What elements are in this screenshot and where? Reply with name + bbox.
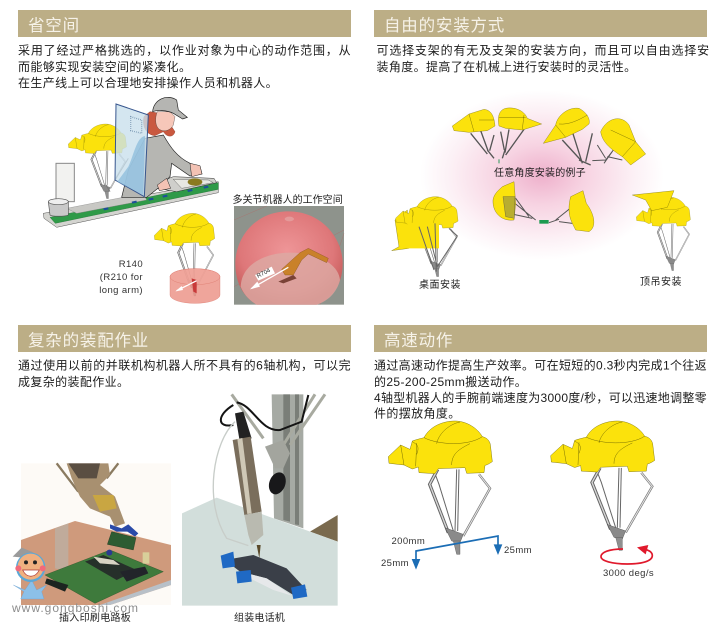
caption: insert PCB: 插入印刷电路板 xyxy=(59,611,131,624)
photo: telephone assembly xyxy=(182,394,338,606)
caption: desktop mounting: 桌面安装 xyxy=(419,278,461,291)
text: R140 label: R140 xyxy=(119,259,143,270)
pink glow background xyxy=(420,90,664,260)
robot: wrist rotation xyxy=(551,421,655,564)
text block: mounting description: 装角度。提高了在机械上进行安装时的灵活性。 xyxy=(376,59,636,74)
robot: 25-200-25mm transfer xyxy=(388,421,502,570)
heading bar: space saving xyxy=(18,10,351,37)
robot: ceiling mounted xyxy=(632,191,690,271)
text block: mounting description: 可选择支架的有无及支架的安装方向，而且可以自由选择安 xyxy=(376,42,710,58)
chart: transfer path arrows xyxy=(412,536,502,570)
safety glass panel xyxy=(115,104,148,197)
labels: transfer distances: 25mm xyxy=(381,558,409,569)
text block: high speed description: 件的摆放角度。 xyxy=(374,406,461,420)
robot: desktop mounted xyxy=(392,197,458,277)
text block: high speed description xyxy=(374,358,707,420)
labels: transfer distances: 200mm xyxy=(392,536,425,547)
heading bar: complex assembly: 复杂的装配作业 xyxy=(28,331,149,350)
text block: assembly description: 成复杂的装配作业。 xyxy=(18,374,129,389)
photo: circuit board insertion xyxy=(21,463,171,605)
heading bar: flexible mounting xyxy=(374,10,707,37)
text block: high speed description: 通过高速动作提高生产效率。可在短短的0.3秒内完成1个往返 xyxy=(374,358,707,372)
panel: flexible mounting xyxy=(374,10,710,291)
text block: high speed description: 4轴型机器人的手腕前端速度为3000度/秒，可以迅速地调整零 xyxy=(374,390,707,405)
heading bar: complex assembly xyxy=(18,325,351,352)
text block: space saving description: 而能够实现安装空间的紧凑化。 xyxy=(18,59,191,74)
heading bar: high speed xyxy=(374,325,707,352)
labels: transfer distances: 25mm xyxy=(504,545,532,556)
illustration: robot cell with operator xyxy=(43,97,218,227)
robots mounted at arbitrary angles xyxy=(452,108,646,232)
text block: assembly description xyxy=(18,358,351,389)
heading bar: space saving: 省空间 xyxy=(28,16,80,35)
caption: ceiling mounting: 顶吊安装 xyxy=(640,275,682,288)
text block: mounting description xyxy=(376,42,710,74)
watermark mascot xyxy=(13,548,47,599)
caption: arbitrary angle examples: 任意角度安装的例子 xyxy=(494,166,586,179)
arrow: rotation 3000 deg/s xyxy=(601,545,652,564)
text: R140 label: long arm) xyxy=(99,285,143,296)
text block: high speed description: 的25-200-25mm搬送动作。 xyxy=(374,374,527,389)
panel: high speed motion xyxy=(374,325,707,579)
robot: tilted up xyxy=(543,108,592,165)
label: R704: R704 xyxy=(256,268,272,280)
robot: tilted right xyxy=(498,108,542,158)
text block: assembly description: 通过使用以前的并联机构机器人所不具有的6轴机构，可以完 xyxy=(18,358,351,372)
label: 3000 deg/s: 3000 deg/s xyxy=(603,568,654,579)
labels: transfer distances xyxy=(381,536,532,569)
caption: articulated robot workspace: 多关节机器人的工作空间 xyxy=(232,193,343,206)
figure: operator xyxy=(122,97,202,197)
text block: space saving description: 采用了经过严格挑选的，以作业对象为中心的动作范围，从 xyxy=(18,42,351,58)
caption: telephone assembly: 组装电话机 xyxy=(234,611,285,624)
text: R140 label: (R210 for xyxy=(100,272,143,283)
panel: complex assembly xyxy=(11,325,351,624)
heading bar: flexible mounting: 自由的安装方式 xyxy=(384,16,505,35)
text: R140 label xyxy=(99,259,143,296)
panel: space saving xyxy=(18,10,351,305)
image: articulated robot spherical workspace xyxy=(234,206,344,305)
heading bar: high speed: 高速动作 xyxy=(384,331,453,350)
robot: tilted left xyxy=(452,109,495,158)
small robot with R140 working cylinder xyxy=(154,213,220,303)
watermark text: www.gongboshi.com xyxy=(11,601,139,615)
text block: space saving description xyxy=(18,42,351,90)
text block: space saving description: 在生产线上可以合理地安排操作人员和机器人。 xyxy=(18,75,278,90)
